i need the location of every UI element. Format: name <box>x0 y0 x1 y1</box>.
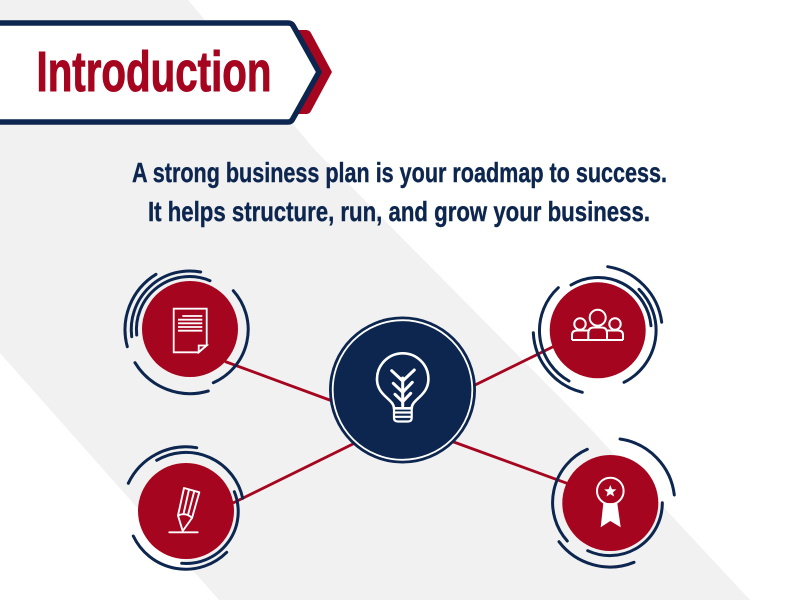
icon: document <box>174 309 207 352</box>
icon: medal <box>597 478 624 527</box>
connector lines <box>225 347 567 503</box>
icon: lightbulb <box>377 353 428 422</box>
hub circle <box>329 316 476 464</box>
central hub: lightbulb <box>329 316 476 464</box>
node circle <box>550 282 646 378</box>
icon: pencil <box>169 488 199 532</box>
intro text <box>132 157 667 227</box>
node circle <box>142 281 238 377</box>
orbit arcs <box>553 439 674 567</box>
node circle <box>562 455 658 551</box>
orbit arcs <box>128 447 243 569</box>
intro text: It helps structure, run, and grow your business. <box>148 196 650 227</box>
banner outline <box>0 23 319 122</box>
banner red shadow <box>296 30 332 114</box>
node: pencil <box>128 447 243 569</box>
orbit arcs <box>533 267 662 392</box>
title banner <box>0 23 332 122</box>
node: business plan document <box>125 271 248 394</box>
node: award <box>553 439 674 567</box>
node: team <box>533 267 662 392</box>
title: Introduction <box>36 40 272 104</box>
node circle <box>138 463 234 559</box>
icon: people <box>572 310 623 340</box>
orbit arcs <box>125 271 248 394</box>
